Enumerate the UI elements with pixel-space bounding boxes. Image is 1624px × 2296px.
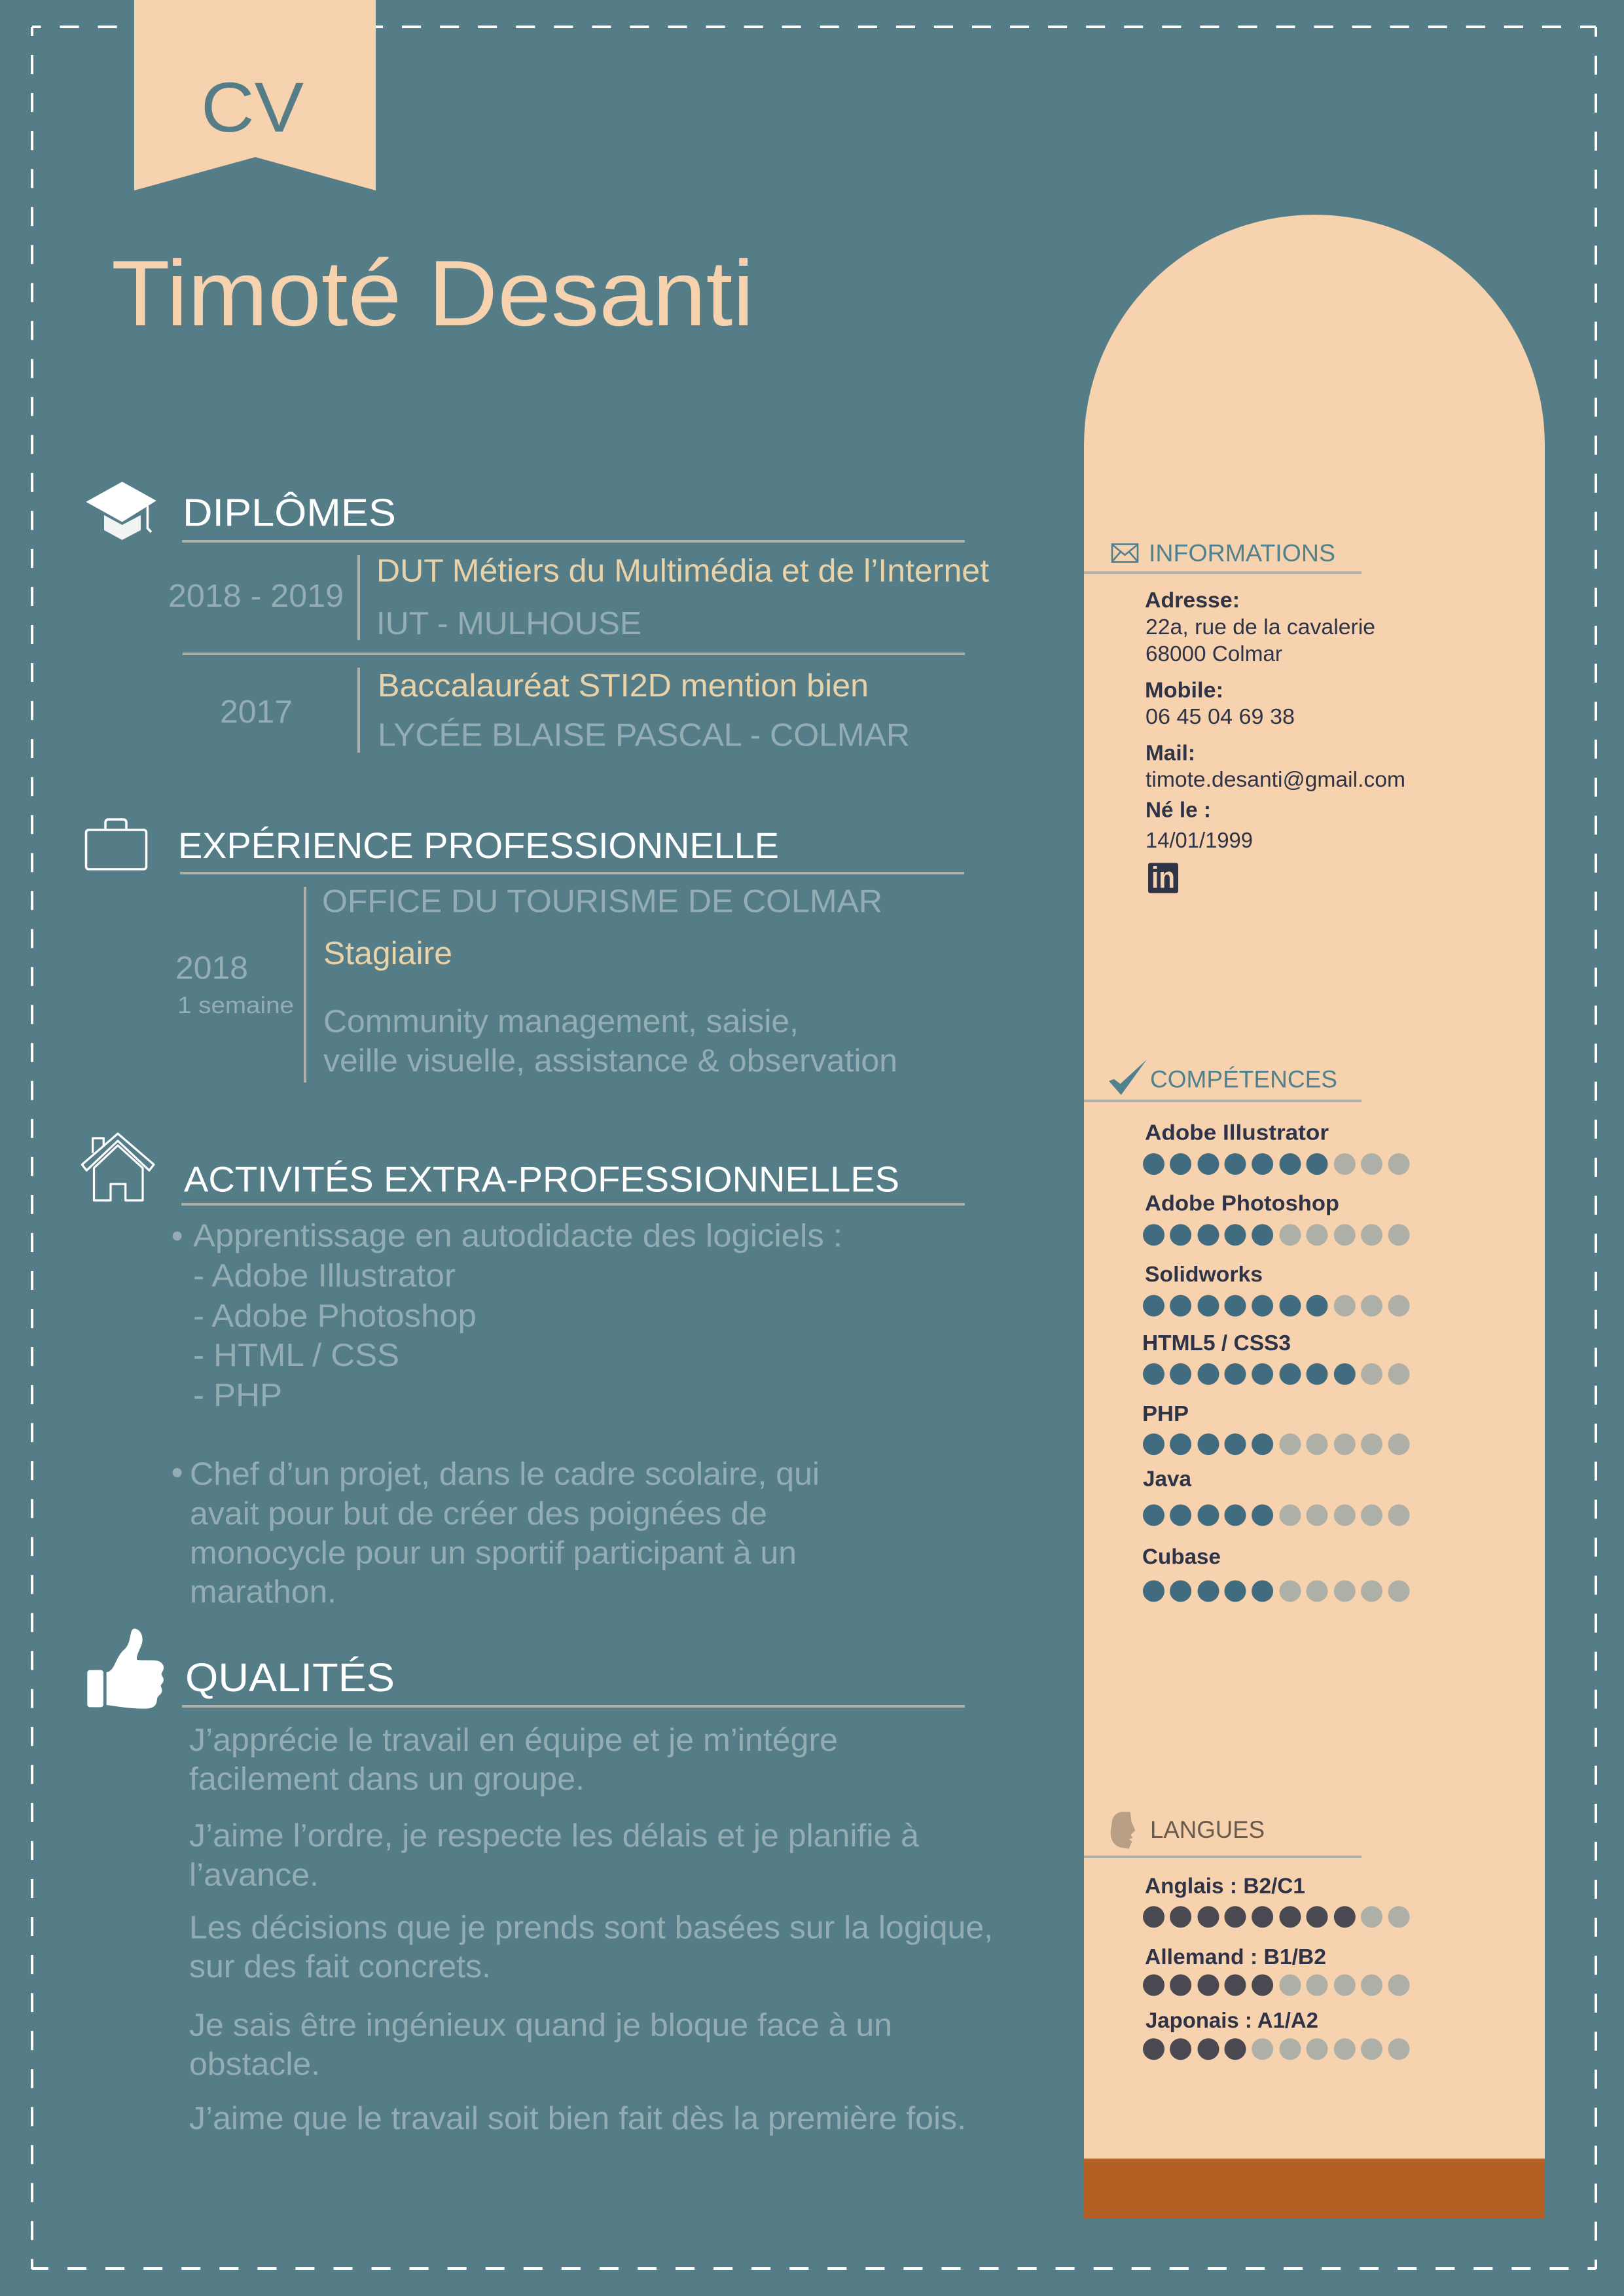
text block: chef de projet: Chef d’un projet, dans le cadre scolaire, qui: [190, 1457, 820, 1492]
skill: Adobe Illustrator: [1143, 1120, 1410, 1175]
contact details: 14/01/1999: [1146, 828, 1253, 852]
heading: activités extra-professionnelles: ACTIVITÉS EXTRA-PROFESSIONNELLES: [184, 1159, 899, 1200]
skill: Adobe Illustrator: Adobe Illustrator: [1145, 1120, 1329, 1144]
skill: PHP: PHP: [1142, 1401, 1189, 1426]
skill: Cubase: Cubase: [1142, 1545, 1221, 1568]
CV label: CV: [201, 67, 304, 147]
skill: Solidworks: [1143, 1262, 1410, 1317]
text block: logiciels: Apprentissage en autodidacte des logiciels :: [193, 1219, 842, 1254]
text block: chef de projet: marathon.: [190, 1575, 336, 1610]
contact details: [1145, 588, 1405, 852]
language: allemand: [1143, 1945, 1410, 1996]
entry: DUT: DUT Métiers du Multimédia et de l’Internet: [376, 554, 989, 589]
skill: HTML5 / CSS3: [1142, 1331, 1410, 1385]
icon: briefcase: [86, 819, 147, 869]
text block: qualités: obstacle.: [189, 2047, 320, 2082]
text block: qualités: J’aime l’ordre, je respecte les délais et je planifie à: [189, 1818, 920, 1854]
icon: check mark: [1109, 1060, 1147, 1095]
heading: compétences: COMPÉTENCES: [1150, 1066, 1337, 1093]
heading: expérience professionnelle: EXPÉRIENCE PROFESSIONNELLE: [178, 825, 779, 866]
contact details: Adresse:: [1145, 588, 1240, 612]
panel: langues: [1084, 1812, 1410, 2060]
text block: qualités: [189, 1723, 993, 2136]
entry: stage: 2018: [175, 951, 248, 986]
text block: logiciels: [173, 1219, 842, 1413]
text block: qualités: J’apprécie le travail en équipe et je m’intégre: [189, 1723, 838, 1758]
skill: Adobe Photoshop: [1143, 1191, 1410, 1246]
text block: qualités: J’aime que le travail soit bien fait dès la première fois.: [189, 2101, 966, 2136]
language: japonais: Japonais : A1/A2: [1146, 2008, 1318, 2032]
contact details: 06 45 04 69 38: [1146, 704, 1295, 728]
contact details: 22a, rue de la cavalerie: [1146, 615, 1375, 639]
skill: Java: Java: [1143, 1467, 1192, 1491]
entry: stage: 1 semaine: [177, 992, 294, 1018]
skill: HTML5 / CSS3: HTML5 / CSS3: [1142, 1331, 1291, 1355]
heading: qualités: QUALITÉS: [185, 1655, 395, 1700]
panel: diplômes: [86, 482, 989, 753]
heading: diplômes: DIPLÔMES: [183, 491, 396, 534]
text block: chef de projet: monocycle pour un sportif participant à un: [190, 1535, 797, 1571]
entry: DUT: 2018 - 2019: [168, 579, 344, 614]
text block: logiciels: - Adobe Illustrator: [193, 1259, 456, 1294]
contact details: Né le :: [1146, 798, 1211, 822]
contact details: 68000 Colmar: [1146, 641, 1282, 666]
language: anglais: Anglais : B2/C1: [1145, 1874, 1305, 1898]
entry: DUT: IUT - MULHOUSE: [376, 606, 641, 641]
icon: house: [82, 1134, 154, 1200]
skill: PHP: [1142, 1401, 1410, 1455]
footer band: [1084, 2159, 1545, 2218]
contact details: Mail:: [1146, 741, 1195, 765]
panel: qualités: [87, 1628, 993, 2136]
heading: langues: LANGUES: [1150, 1816, 1265, 1843]
icon: envelope: [1112, 545, 1138, 562]
panel: informations: [1084, 539, 1405, 894]
entry: stage: Stagiaire: [323, 936, 452, 971]
icon: thumbs up: [87, 1628, 164, 1709]
text block: qualités: Les décisions que je prends sont basées sur la logique,: [189, 1910, 993, 1946]
language: allemand: Allemand : B1/B2: [1145, 1945, 1326, 1969]
entry: baccalauréat: Baccalauréat STI2D mention bien: [378, 668, 869, 704]
CV ribbon banner: [134, 0, 376, 190]
entry: stage: veille visuelle, assistance & observation: [323, 1043, 897, 1079]
text block: qualités: facilement dans un groupe.: [189, 1762, 585, 1797]
language: anglais: [1143, 1874, 1410, 1928]
entry: stage: [175, 884, 897, 1083]
language: japonais: [1143, 2008, 1410, 2060]
skill: Java: [1143, 1467, 1410, 1526]
title: name: Timoté Desanti: [111, 242, 754, 346]
text block: qualités: sur des fait concrets.: [189, 1949, 491, 1984]
heading: informations: INFORMATIONS: [1149, 539, 1335, 567]
text block: logiciels: - HTML / CSS: [193, 1338, 399, 1373]
panel: activités extra-professionnelles: [82, 1134, 965, 1610]
text block: chef de projet: avait pour but de créer des poignées de: [190, 1496, 767, 1532]
entry: DUT: [168, 554, 989, 641]
panel: expérience professionnelle: [86, 819, 964, 1083]
panel: compétences: [1084, 1060, 1410, 1602]
icon: face profile: [1111, 1812, 1135, 1849]
entry: baccalauréat: LYCÉE BLAISE PASCAL - COLMAR: [378, 717, 910, 753]
skill: Cubase: [1142, 1545, 1410, 1602]
skill: Adobe Photoshop: Adobe Photoshop: [1145, 1191, 1339, 1215]
entry: stage: OFFICE DU TOURISME DE COLMAR: [322, 884, 882, 920]
contact details: timote.desanti@gmail.com: [1146, 767, 1405, 791]
text block: chef de projet: [173, 1457, 820, 1610]
text block: logiciels: - Adobe Photoshop: [193, 1299, 477, 1334]
skill: Solidworks: Solidworks: [1145, 1262, 1263, 1286]
text block: logiciels: - PHP: [193, 1378, 282, 1413]
icon: linkedin: in: [1151, 860, 1175, 894]
text block: qualités: Je sais être ingénieux quand je bloque face à un: [189, 2008, 892, 2043]
entry: baccalauréat: 2017: [220, 694, 293, 730]
entry: stage: Community management, saisie,: [323, 1004, 799, 1039]
panel: sidebar arch: [1084, 215, 1545, 2218]
icon: graduation cap: [86, 482, 156, 540]
contact details: Mobile:: [1145, 678, 1223, 702]
text block: qualités: l’avance.: [189, 1857, 319, 1893]
entry: baccalauréat: [220, 668, 910, 753]
